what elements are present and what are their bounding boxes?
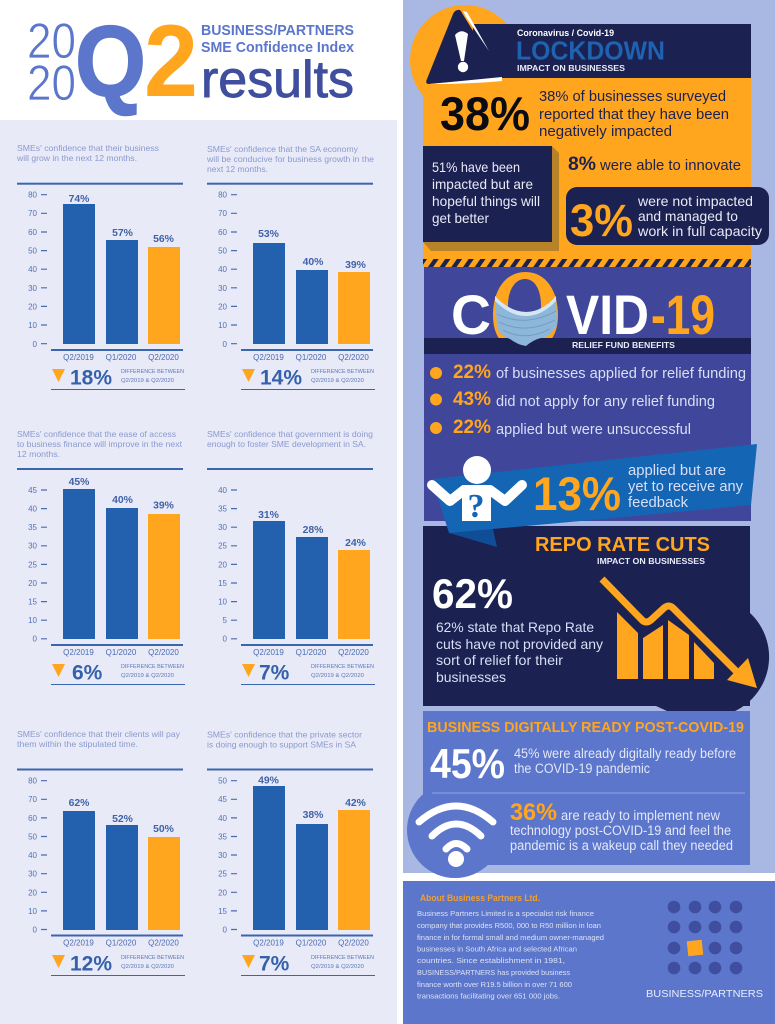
panel: lockdown <box>410 5 769 266</box>
text: 45% description: the COVID-19 pandemic <box>514 761 650 776</box>
chart: private sector: Q1/2020 <box>296 938 327 948</box>
chart: business growth: 80 <box>28 190 38 200</box>
banner <box>473 24 751 78</box>
callout: 3% <box>566 187 769 246</box>
chart: SA economy: DIFFERENCE BETWEEN <box>311 369 374 375</box>
chart: access to finance: Q1/2020 <box>106 648 137 657</box>
chart: clients paying: 12% <box>70 952 112 976</box>
stat: 13%: 13% <box>533 467 621 520</box>
chart: government: 7% <box>259 662 290 684</box>
chart: private sector: Q2/2019 & Q2/2020 <box>311 964 364 970</box>
chart: clients paying: 52% <box>112 814 133 825</box>
chart: clients paying: 40 <box>28 851 38 860</box>
chart: clients paying: 80 <box>28 776 38 786</box>
chart: government: Q2/2020 <box>338 648 369 657</box>
chart: access to finance: 30 <box>28 542 38 550</box>
chart: government: 30 <box>218 523 228 532</box>
chart: access to finance: 15 <box>28 598 38 606</box>
chart: private sector: 30 <box>218 851 228 860</box>
bullet: 22% unsuccessful: 22% <box>453 417 491 438</box>
heading: about: About Business Partners Ltd. <box>420 893 540 904</box>
stat: 62%: 62% <box>432 570 513 617</box>
chart: clients paying: 62% <box>69 798 89 809</box>
chart: business growth: 56% <box>153 234 174 245</box>
chart: SA economy: 40 <box>218 265 228 274</box>
icon: face mask <box>495 296 557 346</box>
text: 36% description: pandemic is a wakeup call they needed <box>510 838 733 853</box>
chart: private sector: 0 <box>223 926 228 934</box>
text: about description: transactions facilitating over 651 000 jobs. <box>417 992 560 1000</box>
panel: blue ribbon 13% <box>432 444 757 547</box>
chart: business growth: 57% <box>112 228 133 239</box>
chart: clients paying: 60 <box>28 814 38 823</box>
chart: SA economy: 39% <box>345 260 366 271</box>
panel: covid relief <box>423 259 751 521</box>
orange block <box>423 78 751 266</box>
chart: private sector: 35 <box>218 832 228 842</box>
text: 62% description: sort of relief for their <box>436 652 563 668</box>
text: 45% description <box>514 746 736 776</box>
logo dots <box>668 901 742 974</box>
chart: SA economy: Q2/2020 <box>338 353 369 362</box>
bullet: 22% applied: 22% <box>453 362 491 383</box>
logo square <box>687 940 703 956</box>
chart: access to finance: 20 <box>28 579 38 588</box>
chart: clients paying: 30 <box>28 870 38 878</box>
callout: 51%: 51% have been <box>432 159 520 175</box>
text: 36% description: are ready to implement new <box>561 808 720 823</box>
panel: repo rate cuts <box>423 526 769 711</box>
chart: clients paying: them within the stipulated time. <box>17 739 138 749</box>
chart: access to finance: to business finance will improve in the next <box>17 439 183 449</box>
heading: COVID-19 <box>451 272 715 350</box>
chart: clients paying: Q1/2020 <box>106 938 137 948</box>
chart: government: DIFFERENCE BETWEEN <box>311 664 374 670</box>
stat: 36%: 36% <box>510 799 557 826</box>
chart: clients paying <box>17 729 185 976</box>
callout: 3%: and managed to <box>638 208 738 224</box>
chart: government <box>207 429 375 685</box>
bullet: 22% applied: of businesses applied for relief funding <box>496 365 746 382</box>
chart: access to finance: 35 <box>28 523 38 532</box>
text: about description: countries. Since establishment in 1981, <box>417 956 565 965</box>
chart: SA economy: Q2/2019 <box>253 353 284 362</box>
chart: access to finance: 6% <box>72 662 103 684</box>
callout: 3%: 3% <box>570 195 633 246</box>
chart: private sector: 40 <box>218 814 228 823</box>
circle bulge <box>656 613 769 711</box>
chart: SA economy <box>206 144 375 390</box>
text: about description: company that provides R500, 000 to R50 million in loan <box>417 921 601 930</box>
panel: about <box>403 881 775 1024</box>
chart: government: Q2/2019 <box>253 648 284 657</box>
banner text: LOCKDOWN <box>516 36 665 66</box>
chart: private sector: 45 <box>218 795 228 804</box>
text: 38% description: reported that they have been <box>539 106 729 123</box>
callout: 51% <box>423 146 559 251</box>
chart: clients paying: 20 <box>28 888 38 898</box>
chart: business growth: 74% <box>69 194 89 205</box>
chart: SA economy: 20 <box>218 302 228 312</box>
stat: 8% <box>568 154 741 175</box>
chart: access to finance: DIFFERENCE BETWEEN <box>121 664 184 670</box>
chart: SA economy: 80 <box>218 190 228 200</box>
banner text: Coronavirus / Covid-19 <box>517 28 614 39</box>
text: about description <box>417 909 604 1000</box>
callout: 51%: impacted but are <box>432 176 533 192</box>
ribbon fold <box>449 525 497 547</box>
chart: SA economy: 50 <box>218 246 228 256</box>
chart: access to finance: 45% <box>69 477 89 488</box>
chart: SA economy: 60 <box>218 228 228 237</box>
hazard stripes <box>423 259 751 267</box>
chart: government: 31% <box>258 510 279 521</box>
text: 45% description: 45% were already digitally ready before <box>514 746 736 761</box>
chart: government: 35 <box>218 504 228 514</box>
chart: business growth: 40 <box>28 265 38 274</box>
icon: warning triangle <box>426 10 502 84</box>
chart: business growth: will grow in the next 12 months. <box>16 153 137 163</box>
chart: SA economy: 70 <box>218 209 228 218</box>
text: 62% description <box>436 619 603 685</box>
text: about description: finance worth over R19.5 billion in over 71 600 <box>417 980 572 989</box>
chart: SA economy: 10 <box>218 321 228 330</box>
chart: clients paying: SMEs' confidence that their clients will pay <box>17 729 181 739</box>
text: about description: BUSINESS/PARTNERS has provided business <box>417 968 570 977</box>
heading: BUSINESS DIGITALLY READY POST-COVID-19 <box>427 719 744 736</box>
text: 13% description <box>628 462 743 511</box>
chart: access to finance: 10 <box>28 616 38 625</box>
bullet: 22% unsuccessful <box>430 417 691 438</box>
chart: government: Q1/2020 <box>296 648 327 657</box>
chart: clients paying: Q2/2019 & Q2/2020 <box>121 964 174 970</box>
chart: SA economy: Q1/2020 <box>296 353 327 362</box>
text: 38% description: 38% of businesses surveyed <box>539 88 726 105</box>
bullet: 43% did not apply: 43% <box>453 389 491 410</box>
chart: business growth: 30 <box>28 284 38 293</box>
chart: access to finance: 40% <box>112 495 133 506</box>
chart: SA economy: 14% <box>260 366 302 390</box>
chart: access to finance: 12 months. <box>17 449 60 459</box>
title: 2020 stacked <box>27 13 76 111</box>
title: 2020 stacked: 20 <box>27 13 76 69</box>
chart: business growth <box>16 143 185 390</box>
stat: 45%: 45% <box>430 740 505 787</box>
heading: COVID-19: C <box>451 283 491 346</box>
heading: COVID-19: VID <box>566 283 649 346</box>
chart: access to finance: Q2/2019 & Q2/2020 <box>121 673 174 679</box>
icon: person with question mark <box>432 456 522 525</box>
subtitle: BUSINESS/PARTNERS <box>201 22 354 39</box>
band <box>424 338 751 354</box>
chart: business growth: 50 <box>28 246 38 256</box>
text: 62% description: businesses <box>436 669 506 685</box>
chart: access to finance: 25 <box>28 560 38 570</box>
chart: government: 0 <box>223 634 228 644</box>
chart: SA economy: SMEs' confidence that the SA economy <box>207 144 359 154</box>
chart: private sector: 25 <box>218 870 228 878</box>
chart: private sector: 49% <box>258 776 279 786</box>
text: 38% description: negatively impacted <box>539 123 672 140</box>
chart: government: 24% <box>345 538 366 549</box>
text: about description: businesses in South Africa and selected African <box>417 944 577 954</box>
chart: clients paying: 70 <box>28 795 38 804</box>
chart: government: enough to foster SME development in SA. <box>207 439 366 449</box>
title: Q: Q <box>75 6 146 118</box>
text: 62% description: cuts have not provided any <box>436 636 603 652</box>
ribbon <box>432 444 757 533</box>
chart: government: 28% <box>303 525 323 536</box>
stat: 8%: 8% <box>568 154 596 175</box>
text: 38% description <box>539 88 729 140</box>
chart: government: 15 <box>218 579 228 588</box>
text: about description: Business Partners Limited is a specialist risk finance <box>417 909 594 918</box>
callout: 3%: were not impacted <box>637 193 753 209</box>
chart: access to finance <box>17 429 185 685</box>
banner text <box>516 28 665 73</box>
chart: business growth: Q1/2020 <box>106 353 137 362</box>
chart: access to finance: 45 <box>28 486 38 495</box>
title: 2020 stacked: 20 <box>27 55 76 111</box>
chart: access to finance: Q2/2019 <box>63 648 94 657</box>
chart: government: 10 <box>218 598 228 606</box>
chart: private sector: 50 <box>218 776 228 786</box>
chart: clients paying: 50 <box>28 832 38 842</box>
chart: SA economy: 30 <box>218 284 228 293</box>
title: 2: 2 <box>144 4 198 118</box>
chart: government: Q2/2019 & Q2/2020 <box>311 673 364 679</box>
text: 36% description: technology post-COVID-19 and feel the <box>510 823 731 838</box>
chart: SA economy: Q2/2019 & Q2/2020 <box>311 378 364 384</box>
text: 13% description: applied but are <box>628 462 726 479</box>
text: 13% description: feedback <box>628 494 688 511</box>
chart: business growth: 60 <box>28 228 38 237</box>
icon: falling chart <box>602 579 757 688</box>
chart: government: 40 <box>218 486 228 495</box>
text: 62% description: 62% state that Repo Rate <box>436 619 594 635</box>
chart: private sector: 7% <box>259 952 290 976</box>
chart: government: SMEs' confidence that government is doing <box>207 429 373 439</box>
icon: wifi <box>407 782 503 878</box>
icon: person with question mark: ? <box>468 488 484 525</box>
chart: business growth: Q2/2019 <box>63 353 94 362</box>
title: results: results <box>201 51 354 109</box>
orange circle <box>410 5 520 115</box>
stat: 8%: were able to innovate <box>599 157 741 174</box>
text: relief fund benefits: RELIEF FUND BENEFITS <box>572 340 675 350</box>
chart: business growth: Q2/2020 <box>148 353 179 362</box>
heading: COVID-19: -19 <box>651 283 715 346</box>
chart: government: 25 <box>218 542 228 550</box>
bullet: 22% unsuccessful: applied but were unsuccessful <box>496 421 691 438</box>
chart: business growth: Q2/2019 & Q2/2020 <box>121 378 174 384</box>
chart: private sector: Q2/2020 <box>338 938 369 948</box>
bullet: 43% did not apply <box>430 389 715 410</box>
chart: clients paying: DIFFERENCE BETWEEN <box>121 955 184 961</box>
chart: private sector: SMEs' confidence that the private sector <box>207 730 362 740</box>
text: 36% description <box>510 808 733 853</box>
chart: business growth: DIFFERENCE BETWEEN <box>121 369 184 375</box>
subtitle: SME Confidence Index <box>201 39 355 56</box>
chart: business growth: 10 <box>28 321 38 330</box>
logo text: BUSINESS/PARTNERS <box>646 988 763 1000</box>
chart: SA economy: next 12 months. <box>207 164 268 174</box>
chart: business growth: SMEs' confidence that their business <box>17 143 159 153</box>
heading: repo rate cuts: REPO RATE CUTS <box>535 534 710 556</box>
chart: private sector: Q2/2019 <box>253 938 284 948</box>
chart: access to finance: Q2/2020 <box>148 648 179 657</box>
panel: charts background <box>0 120 397 1024</box>
chart: access to finance: 0 <box>33 634 38 644</box>
chart: access to finance: SMEs' confidence that the ease of access <box>17 429 176 439</box>
chart: business growth: 0 <box>33 340 38 349</box>
chart: business growth: 20 <box>28 302 38 312</box>
bullet: 43% did not apply: did not apply for any relief funding <box>496 393 715 410</box>
chart: private sector: 20 <box>218 888 228 898</box>
chart: access to finance: 40 <box>28 504 38 514</box>
callout: 3%: work in full capacity <box>637 223 762 239</box>
text: 13% description: yet to receive any <box>628 478 743 495</box>
header title <box>27 4 355 118</box>
chart: private sector: is doing enough to support SMEs in SA <box>207 740 356 750</box>
chart: access to finance: 39% <box>153 500 174 512</box>
chart: SA economy: will be conducive for business growth in the <box>206 154 374 164</box>
chart: business growth: 18% <box>70 366 112 390</box>
chart: business growth: 70 <box>28 209 38 218</box>
chart: clients paying: 50% <box>153 824 174 835</box>
banner text: IMPACT ON BUSINESSES <box>517 63 625 73</box>
panel: digitally ready <box>407 711 750 878</box>
chart: clients paying: 0 <box>33 926 38 934</box>
chart: private sector: DIFFERENCE BETWEEN <box>311 955 374 961</box>
stat: 38%: 38% <box>440 87 530 140</box>
chart: clients paying: Q2/2020 <box>148 938 179 948</box>
chart: SA economy: 53% <box>258 229 279 240</box>
chart: private sector: 15 <box>218 907 228 916</box>
chart: clients paying: Q2/2019 <box>63 938 94 948</box>
subtitle <box>201 22 355 56</box>
chart: clients paying: 10 <box>28 907 38 916</box>
callout: 51%: get better <box>432 210 489 226</box>
chart: SA economy: 0 <box>223 340 228 349</box>
chart: SA economy: 40% <box>303 257 323 268</box>
chart: government: 5 <box>223 616 228 625</box>
chart: private sector <box>207 730 375 976</box>
panel: right column background <box>403 0 775 873</box>
bullet: 22% applied <box>430 362 746 383</box>
text: about description: finance in for formal small and medium owner-managed <box>417 933 604 942</box>
chart: private sector: 38% <box>303 810 323 821</box>
chart: government: 20 <box>218 560 228 570</box>
subheading: IMPACT ON BUSINESSES <box>597 556 705 566</box>
chart: private sector: 42% <box>345 798 366 809</box>
callout: 51%: hopeful things will <box>432 193 540 209</box>
